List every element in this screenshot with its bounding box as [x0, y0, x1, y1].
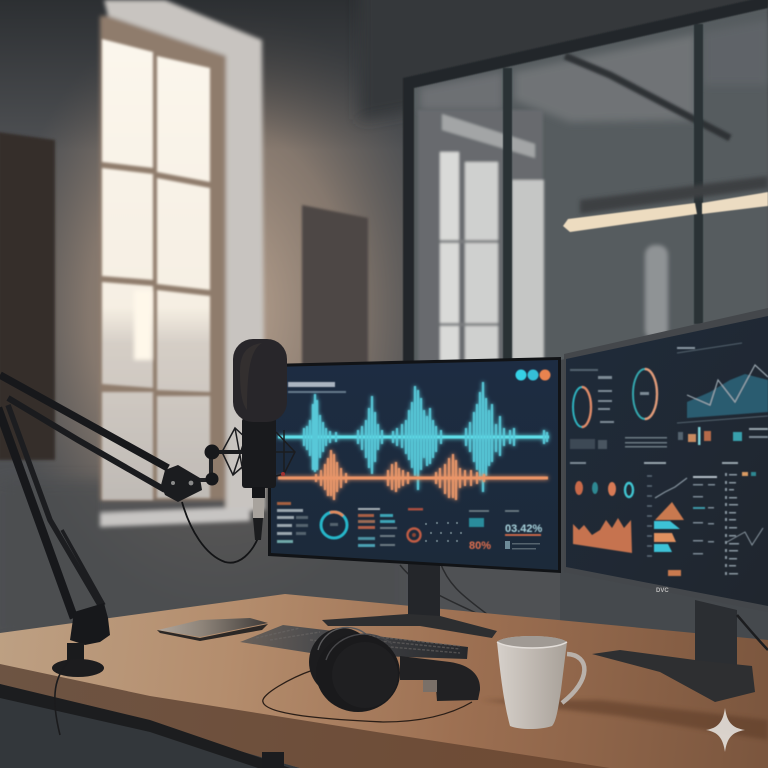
desk underside [0, 684, 300, 768]
screen: percent tiles: 80% [469, 540, 491, 552]
mic windscreen [233, 339, 287, 422]
table leg [262, 752, 284, 768]
shock mount [218, 428, 295, 476]
joint plate [161, 465, 202, 502]
right monitor stand [592, 600, 768, 702]
top-left labels [570, 369, 614, 449]
microphone with shock mount [204, 339, 295, 540]
headphones [263, 627, 480, 722]
mic body [242, 418, 276, 488]
list column [725, 472, 763, 575]
mic cable [182, 502, 258, 563]
middle table [693, 476, 717, 554]
acoustic panel centre [302, 205, 368, 372]
orange area chart [573, 518, 632, 553]
connector [200, 455, 218, 480]
screen heading [288, 382, 346, 393]
mic boom arm [0, 375, 258, 618]
rear arm [0, 408, 74, 618]
coffee mug [497, 636, 584, 729]
waveform: orange [278, 450, 548, 500]
line and area chart [677, 343, 768, 423]
axis ticks [647, 476, 652, 556]
boom clamp base [52, 603, 110, 735]
waveform: cyan [278, 382, 549, 492]
rising line chart [655, 478, 687, 498]
back wall lower band behind desk [560, 320, 768, 650]
reflected arch [645, 245, 668, 340]
right monitor [564, 308, 768, 612]
upper arm [0, 375, 168, 468]
lower arm [8, 398, 165, 490]
screen: red gauge [408, 508, 423, 542]
xlr connector [252, 487, 265, 498]
desk front edge [0, 664, 610, 768]
desk [0, 594, 768, 768]
screen: metric columns [358, 508, 397, 547]
reflected ceiling [514, 34, 696, 122]
ceiling light bar [563, 192, 768, 232]
chrome logo: DVC [656, 588, 669, 594]
desk shadow [480, 700, 768, 740]
beam over the light [580, 176, 768, 214]
window panes [102, 39, 210, 500]
status dots [516, 370, 550, 380]
phone on desk [157, 618, 268, 641]
monitor cables [400, 562, 497, 622]
top-centre gauge [633, 369, 657, 419]
sparkle mark [706, 708, 745, 752]
light streak [134, 290, 152, 360]
top-left gauge [573, 387, 591, 427]
glass partition with reflection [403, 0, 768, 364]
partition frame [403, 0, 768, 364]
left monitor stand [322, 562, 497, 638]
gauge bars [625, 437, 667, 448]
left monitor [268, 357, 561, 573]
reflected window [418, 110, 544, 364]
keyboard [240, 625, 468, 659]
screen: headline stat [505, 510, 543, 550]
mini widgets row [678, 427, 768, 445]
screen: percent tiles [469, 510, 491, 552]
window with glowing panes [100, 0, 265, 527]
ring row [570, 462, 738, 497]
screen: donut chart [321, 512, 347, 538]
screen: headline stat: 03.42% [505, 523, 543, 535]
screen: dot grid [425, 522, 462, 542]
reflected ceiling track [565, 56, 730, 138]
acoustic panel left [0, 132, 55, 460]
window reveal and sill [100, 0, 265, 527]
orange and cyan bars [654, 502, 684, 576]
screen: legend list [277, 502, 308, 543]
